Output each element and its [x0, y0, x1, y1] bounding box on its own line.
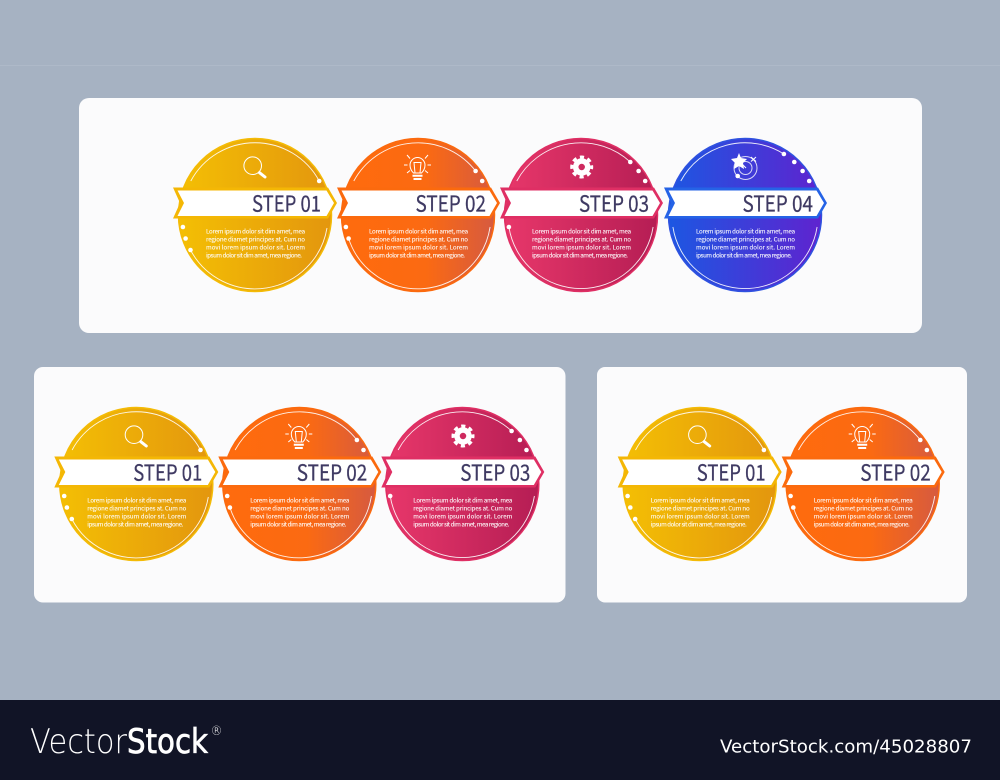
body text: Lorem ipsum dolor sit dim amet, mea [369, 226, 468, 236]
panel: two steps [597, 367, 967, 602]
ribbon: STEP 01 [133, 456, 202, 488]
body text: ipsum dolor sit dim amet, mea regione. [651, 520, 747, 528]
body text [250, 496, 350, 528]
step 02 [218, 408, 381, 560]
footer id: VectorStock.com/45028807 [720, 736, 972, 758]
ribbon [664, 186, 827, 218]
body text: Lorem ipsum dolor sit dim amet, mea [696, 226, 795, 236]
icon: magnifier [125, 426, 146, 446]
body text: movi lorem ipsum dolor sit. Lorem [696, 242, 795, 252]
footer logo: ® [210, 724, 222, 738]
step 03 [500, 138, 663, 292]
body text: Lorem ipsum dolor sit dim amet, mea [814, 496, 913, 504]
body text: Lorem ipsum dolor sit dim amet, mea [87, 496, 186, 504]
body text: Lorem ipsum dolor sit dim amet, mea [532, 226, 631, 236]
footer bar [0, 700, 1000, 780]
body text: Lorem ipsum dolor sit dim amet, mea [413, 496, 512, 504]
ribbon [618, 456, 782, 488]
step 02 [337, 138, 500, 292]
step 03 [381, 408, 544, 560]
body text: regione diamet principes at. Cum no [532, 234, 631, 244]
ribbon: STEP 03 [460, 456, 530, 488]
icon: gear [572, 157, 592, 177]
body text: regione diamet principes at. Cum no [250, 504, 350, 512]
icon: magnifier [244, 157, 265, 177]
body text: movi lorem ipsum dolor sit. Lorem [87, 512, 187, 520]
body text: movi lorem ipsum dolor sit. Lorem [369, 242, 468, 252]
panel: three steps [34, 367, 566, 602]
body text [651, 496, 750, 528]
body text: ipsum dolor sit dim amet, mea regione. [250, 520, 347, 528]
ribbon: STEP 02 [416, 186, 486, 218]
step 01 [618, 408, 782, 560]
body text: ipsum dolor sit dim amet, mea regione. [532, 250, 628, 260]
body text [206, 226, 305, 260]
body text: regione diamet principes at. Cum no [369, 234, 468, 244]
body text [532, 226, 631, 260]
body text: ipsum dolor sit dim amet, mea regione. [369, 250, 465, 260]
body text: ipsum dolor sit dim amet, mea regione. [413, 520, 510, 528]
footer logo: Vector [30, 722, 127, 762]
icon: light bulb [404, 155, 431, 179]
body text: ipsum dolor sit dim amet, mea regione. [87, 520, 184, 528]
ribbon: STEP 04 [742, 186, 813, 218]
ribbon: STEP 01 [697, 456, 766, 488]
body text: Lorem ipsum dolor sit dim amet, mea [651, 496, 750, 504]
ribbon [782, 456, 945, 488]
step 04 [664, 138, 827, 292]
icon: magnifier [689, 426, 710, 446]
icon: gear [453, 426, 473, 446]
footer logo: Stock [127, 722, 208, 762]
ribbon: STEP 03 [579, 186, 649, 218]
ribbon [381, 456, 544, 488]
ribbon: STEP 02 [297, 456, 367, 488]
body text: movi lorem ipsum dolor sit. Lorem [413, 512, 513, 520]
body text: regione diamet principes at. Cum no [814, 504, 913, 512]
body text: movi lorem ipsum dolor sit. Lorem [814, 512, 913, 520]
icon: light bulb [849, 424, 876, 448]
ribbon: STEP 02 [860, 456, 931, 488]
ribbon: STEP 01 [252, 186, 321, 218]
ribbon [173, 186, 337, 218]
body text [87, 496, 187, 528]
body text: Lorem ipsum dolor sit dim amet, mea [250, 496, 349, 504]
body text [814, 496, 913, 528]
icon: light bulb [285, 424, 312, 448]
ribbon [54, 456, 218, 488]
body text [369, 226, 468, 260]
ribbon [500, 186, 663, 218]
body text: regione diamet principes at. Cum no [87, 504, 187, 512]
step 02 [782, 408, 945, 560]
body text: ipsum dolor sit dim amet, mea regione. [696, 250, 792, 260]
ribbon [218, 456, 381, 488]
footer logo [30, 722, 222, 762]
body text: regione diamet principes at. Cum no [413, 504, 513, 512]
body text [413, 496, 513, 528]
body text: movi lorem ipsum dolor sit. Lorem [651, 512, 750, 520]
step 01 [173, 138, 337, 292]
ribbon [337, 186, 500, 218]
body text: movi lorem ipsum dolor sit. Lorem [250, 512, 350, 520]
body text: Lorem ipsum dolor sit dim amet, mea [206, 226, 305, 236]
body text [696, 226, 795, 260]
body text: movi lorem ipsum dolor sit. Lorem [206, 242, 305, 252]
body text: movi lorem ipsum dolor sit. Lorem [532, 242, 631, 252]
icon: target [731, 153, 757, 180]
body text: regione diamet principes at. Cum no [206, 234, 305, 244]
body text: ipsum dolor sit dim amet, mea regione. [206, 250, 302, 260]
body text: ipsum dolor sit dim amet, mea regione. [814, 520, 910, 528]
panel: four steps [79, 98, 922, 333]
step 01 [54, 408, 218, 560]
body text: regione diamet principes at. Cum no [696, 234, 795, 244]
body text: regione diamet principes at. Cum no [651, 504, 750, 512]
